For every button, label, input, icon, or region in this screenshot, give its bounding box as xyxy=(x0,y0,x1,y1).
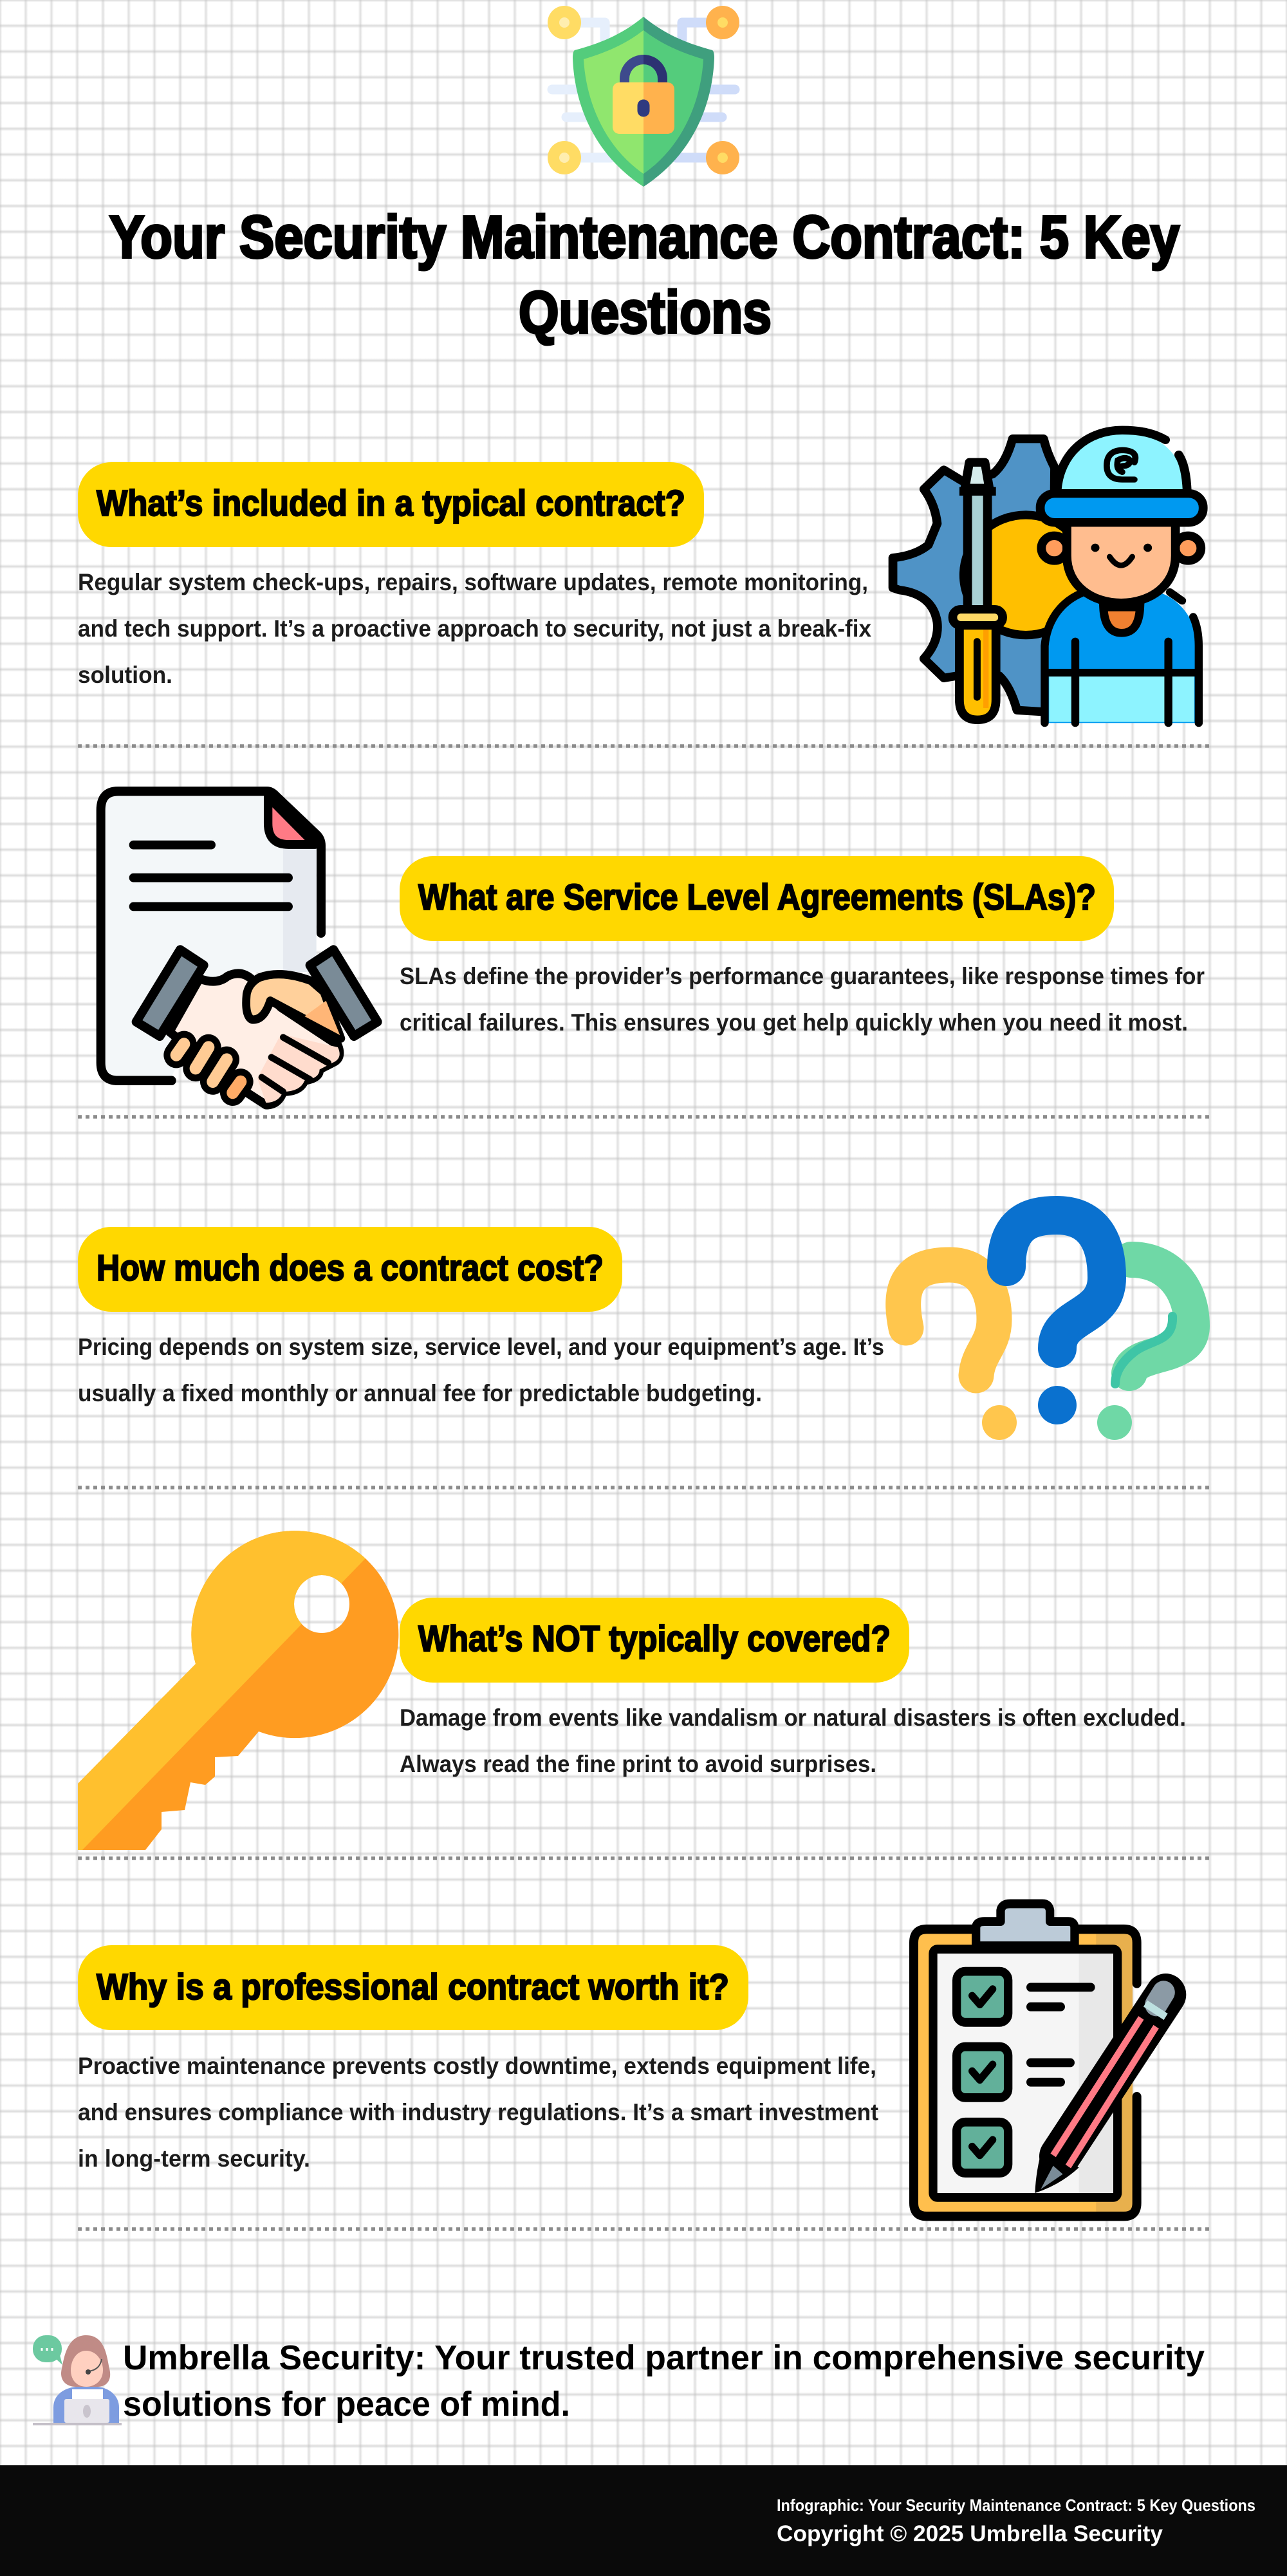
closing statement xyxy=(33,2335,1205,2425)
icon: question marks xyxy=(903,1215,1192,1440)
divider: section 1 xyxy=(78,744,1210,748)
text block: SLAs: SLAs define the provider’s performance guarantees, like response times for xyxy=(400,963,1205,989)
text block: SLAs xyxy=(400,963,1205,1036)
text block: closing statement xyxy=(123,2338,1205,2423)
heading pill: what's included: What’s included in a typical contract? xyxy=(97,483,685,524)
divider: section 2 xyxy=(78,1115,1210,1119)
heading pill: worth it xyxy=(78,1945,748,2030)
heading pill: SLAs: What are Service Level Agreements (SLAs)? xyxy=(418,877,1096,918)
panel: worth it xyxy=(78,1904,1166,2216)
text block: what's included: Regular system check-ups, repairs, software updates, remote monitoring, xyxy=(78,569,868,595)
heading pill: worth it: Why is a professional contract worth it? xyxy=(97,1966,729,2008)
text block: what's included: solution. xyxy=(78,662,172,688)
text block: worth it: in long-term security. xyxy=(78,2145,310,2172)
text block: cost xyxy=(78,1334,884,1406)
footer text: Copyright © 2025 Umbrella Security xyxy=(777,2521,1163,2546)
text block: what's included: and tech support. It’s a proactive approach to security, not just a break-fix xyxy=(78,615,871,642)
panel: not covered xyxy=(78,1531,1186,1850)
icon: key xyxy=(78,1531,398,1850)
text block: SLAs: critical failures. This ensures you get help quickly when you need it most. xyxy=(400,1009,1188,1036)
divider: section 3 xyxy=(78,1486,1210,1489)
footer text xyxy=(777,2496,1255,2546)
panel: contract cost xyxy=(78,1215,1192,1440)
text block: not covered: Damage from events like vandalism or natural disasters is often excluded. xyxy=(400,1704,1186,1731)
panel: what's included xyxy=(78,430,1203,723)
heading pill: SLAs xyxy=(400,856,1114,941)
divider: section 5 xyxy=(78,2227,1210,2231)
icon: worker with gear and screwdriver xyxy=(893,430,1203,723)
panel: service level agreements xyxy=(101,791,1205,1105)
heading pill: not covered: What’s NOT typically covered? xyxy=(418,1618,891,1659)
heading pill: cost: How much does a contract cost? xyxy=(97,1247,604,1289)
text block: what's included xyxy=(78,569,871,688)
text block: worth it: and ensures compliance with industry regulations. It’s a smart investment xyxy=(78,2099,878,2125)
text block: not covered: Always read the fine print to avoid surprises. xyxy=(400,1751,876,1777)
divider: section 4 xyxy=(78,1856,1210,1860)
title: Questions xyxy=(519,279,772,346)
text block: worth it: Proactive maintenance prevents costly downtime, extends equipment life, xyxy=(78,2053,876,2079)
heading pill: not covered xyxy=(400,1598,909,1683)
icon: shield with padlock xyxy=(548,6,739,187)
text block: cost: Pricing depends on system size, service level, and your equipment’s age. It’s xyxy=(78,1334,884,1360)
icon: document with handshake xyxy=(101,791,378,1105)
icon: clipboard checklist with pencil xyxy=(914,1904,1166,2216)
text block: worth it xyxy=(78,2053,878,2172)
text block: cost: usually a fixed monthly or annual fee for predictable budgeting. xyxy=(78,1380,762,1406)
heading pill: cost xyxy=(78,1227,622,1312)
footer xyxy=(0,2465,1287,2576)
title xyxy=(109,203,1180,346)
text block: closing statement: solutions for peace of mind. xyxy=(123,2385,570,2423)
icon: support agent with laptop xyxy=(33,2335,122,2425)
text block: closing statement: Umbrella Security: Your trusted partner in comprehensive security xyxy=(123,2338,1205,2377)
heading pill: what's included xyxy=(78,462,704,547)
text block: not covered xyxy=(400,1704,1186,1777)
